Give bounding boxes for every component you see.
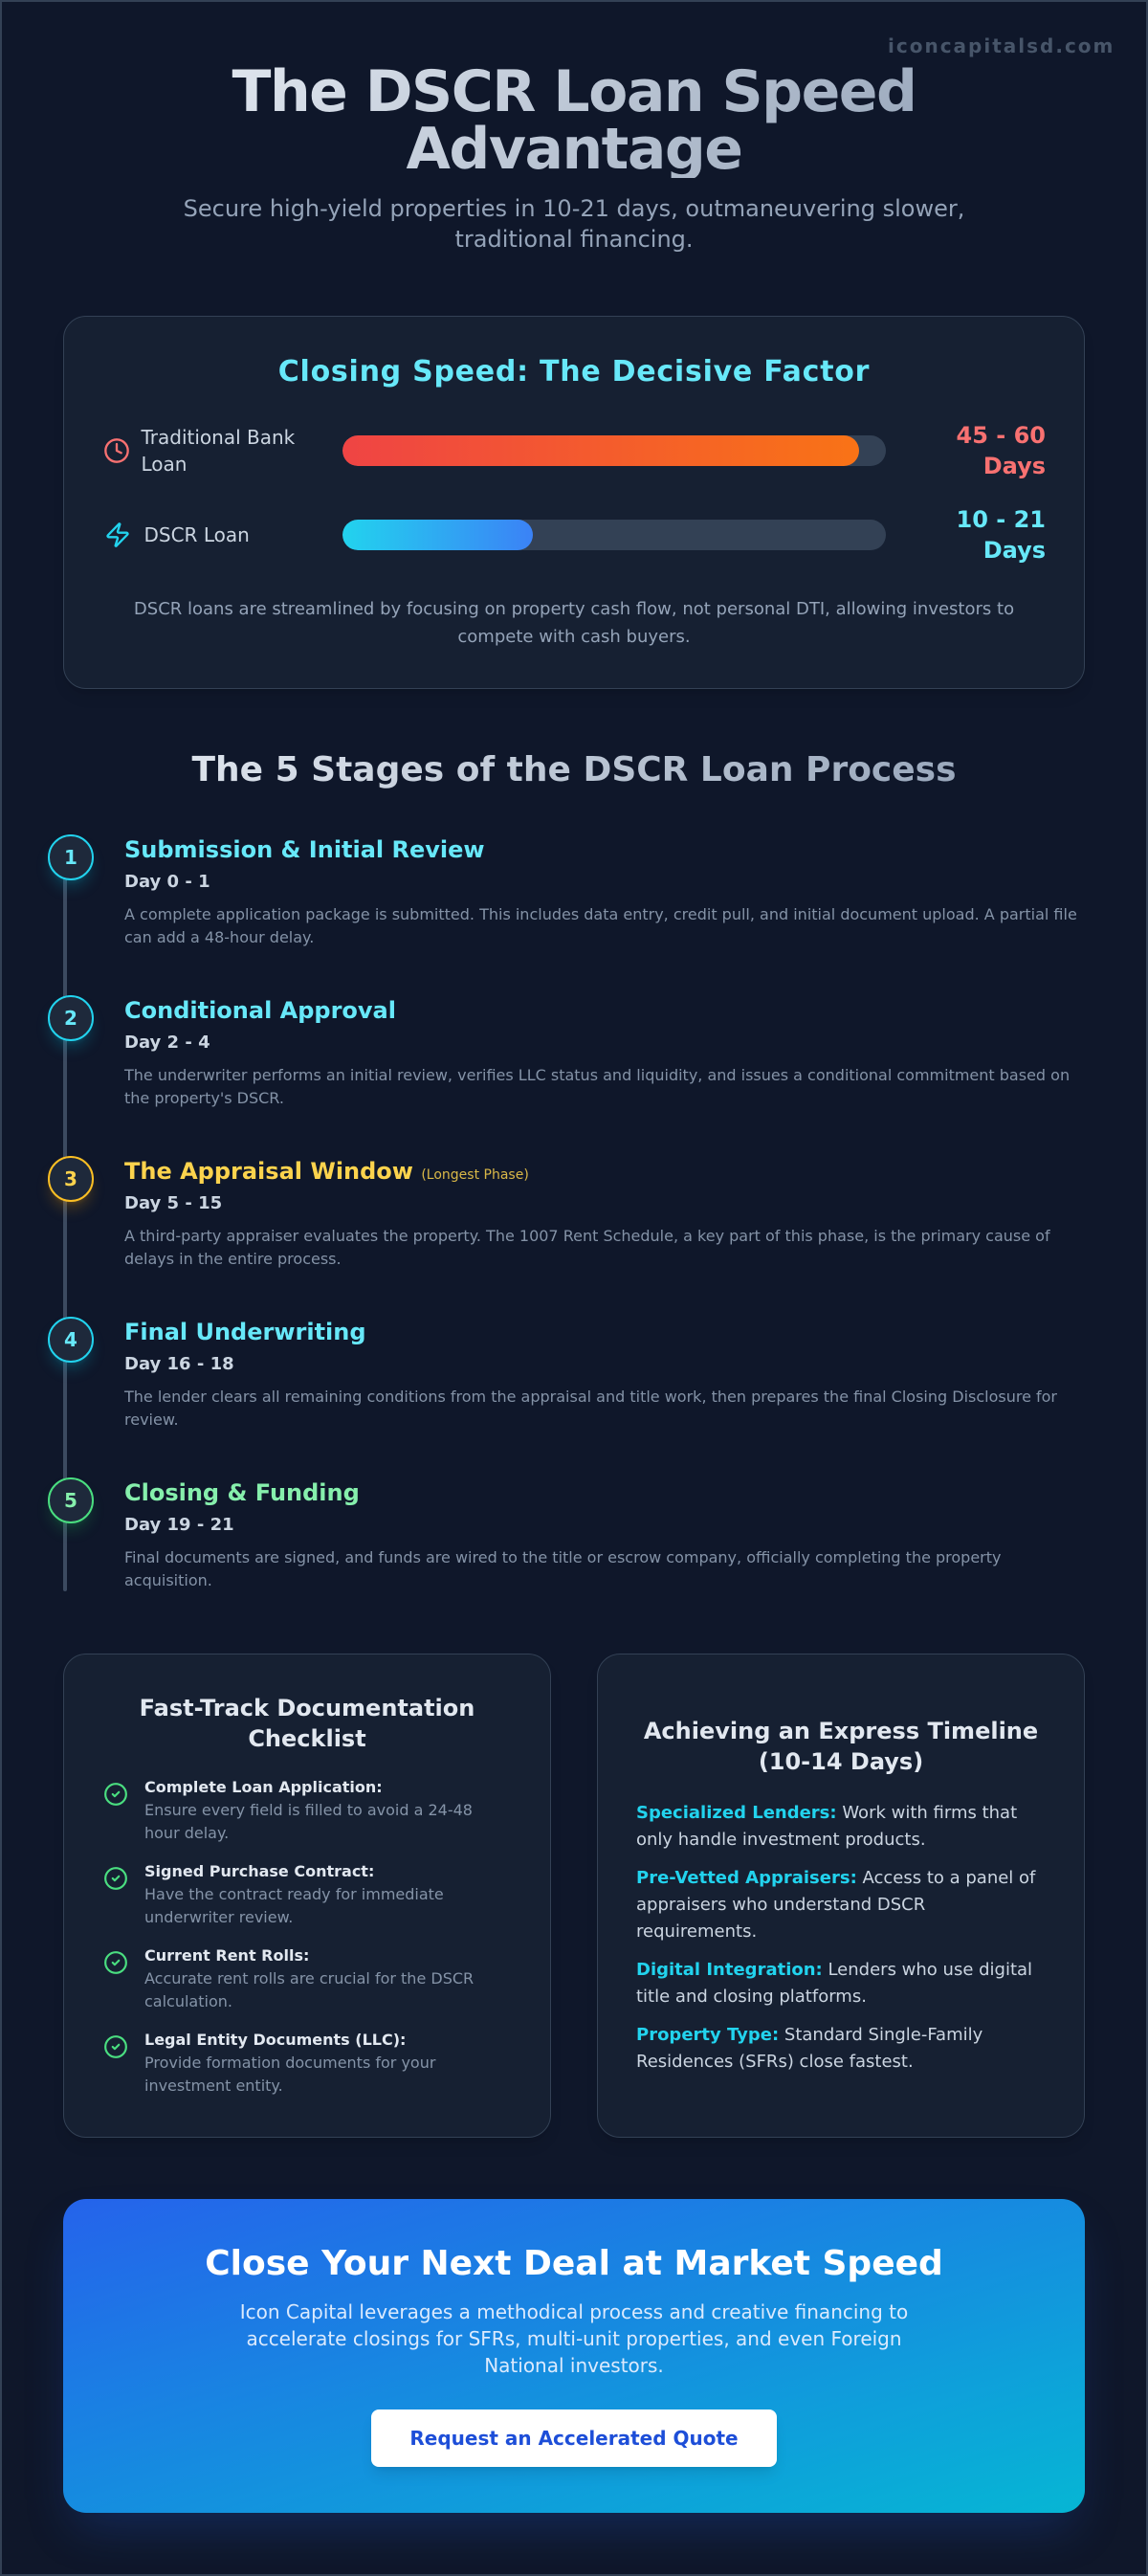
stage 5 marker (48, 1477, 94, 1523)
point: pre-vetted appraisers: appraisers who understand DSCR (636, 1895, 925, 1915)
CTA text: National investors. (484, 2354, 664, 2377)
checklist item 2: underwriter review. (144, 1908, 293, 1926)
point: digital integration: title and closing platforms. (636, 1987, 867, 2007)
label: traditional bank loan (141, 426, 295, 476)
panel heading: closing speed: Closing Speed: The Decisive Factor (278, 355, 870, 389)
closing speed note (134, 599, 1014, 647)
timeline line (63, 861, 67, 1591)
CTA button (371, 2409, 777, 2467)
checklist item 3: Current Rent Rolls: (144, 1946, 309, 1965)
express timeline heading: Achieving an Express Timeline (644, 1718, 1038, 1744)
stage 5: Final documents are signed, and funds are wired to the title or escrow company, officially completing the property (124, 1548, 1001, 1566)
value: DSCR days: Days (983, 537, 1046, 564)
stage 5: Closing & Funding (124, 1479, 360, 1506)
stage 3 marker: 3 (64, 1167, 77, 1190)
stage 2: The underwriter performs an initial review, verifies LLC status and liquidity, and issues a conditional commitment based on (124, 1066, 1070, 1084)
checklist item 4: Provide formation documents for your (144, 2054, 435, 2072)
point: pre-vetted appraisers (636, 1868, 1036, 1942)
label: traditional bank loan: Traditional Bank (142, 426, 295, 449)
checklist heading: Checklist (248, 1725, 366, 1752)
CTA heading: Close Your Next Deal at Market Speed (205, 2244, 943, 2283)
point: pre-vetted appraisers: requirements. (636, 1921, 757, 1942)
stage 4 (124, 1319, 1057, 1429)
stage 4: review. (124, 1410, 179, 1429)
point: digital integration: Digital Integration: Lenders who use digital (636, 1960, 1032, 1980)
express timeline heading (644, 1718, 1038, 1775)
panel: closing speed (63, 316, 1085, 689)
stage 3 (124, 1158, 1050, 1268)
stage 1: A complete application package is submitted. This includes data entry, credit pull, and initial document upload. A partial file (124, 905, 1077, 923)
checklist item 4: Legal Entity Documents (LLC): (144, 2031, 406, 2049)
CTA text: accelerate closings for SFRs, multi-unit properties, and even Foreign (246, 2327, 902, 2350)
stage 1 (124, 836, 1077, 946)
stage 2 (124, 997, 1070, 1107)
stage 1 marker (48, 834, 94, 880)
stage 5: Day 19 - 21 (124, 1515, 234, 1535)
label: traditional bank loan: Loan (142, 453, 187, 476)
icon: check 1 (104, 1783, 127, 1806)
closing speed note: compete with cash buyers. (457, 627, 691, 647)
icon: check 4 (104, 2035, 127, 2058)
stage 5 marker: 5 (64, 1489, 77, 1512)
bar: DSCR (342, 520, 886, 550)
stage 2 marker: 2 (64, 1007, 77, 1030)
checklist item 3: Accurate rent rolls are crucial for the DSCR (144, 1969, 474, 1988)
stage 3: delays in the entire process. (124, 1250, 342, 1268)
stage 1: can add a 48-hour delay. (124, 928, 314, 946)
icon: check 3 (104, 1951, 127, 1974)
subtitle: traditional financing. (454, 226, 694, 253)
icon: clock (104, 438, 129, 463)
checklist item 1: hour delay. (144, 1824, 229, 1842)
point: pre-vetted appraisers: Pre-Vetted Appraisers: Access to a panel of (636, 1868, 1035, 1888)
point: property type: Property Type: Standard Single-Family (636, 2025, 982, 2045)
value: traditional days (957, 422, 1046, 479)
stage 2: Day 2 - 4 (124, 1033, 210, 1053)
point: specialized lenders: only handle investment products. (636, 1830, 926, 1850)
point: specialized lenders (636, 1803, 1017, 1850)
panel: checklist (63, 1654, 551, 2138)
stage 5: acquisition. (124, 1571, 212, 1589)
value: DSCR days: 10 - 21 (957, 506, 1046, 533)
point: property type: Residences (SFRs) close fastest. (636, 2052, 914, 2072)
icon: lightning bolt (106, 522, 129, 547)
stage 5 (124, 1479, 1001, 1589)
checklist item 4: investment entity. (144, 2076, 283, 2095)
icon: check 2 (104, 1867, 127, 1890)
stage 1 marker: 1 (64, 846, 77, 869)
value: traditional days: 45 - 60 (957, 422, 1046, 449)
checklist item 2: Signed Purchase Contract: (144, 1862, 374, 1880)
closing speed note: DSCR loans are streamlined by focusing on property cash flow, not personal DTI, allowing investors to (134, 599, 1014, 619)
value: traditional days: Days (983, 453, 1046, 479)
stage 4 marker (48, 1317, 94, 1363)
heading: five stages: The 5 Stages of the DSCR Loan Process (191, 750, 957, 789)
watermark: iconcapitalsd.com (888, 34, 1115, 57)
stage 2: Conditional Approval (124, 997, 396, 1024)
point: specialized lenders: Specialized Lenders: Work with firms that (636, 1803, 1017, 1823)
checklist item 1: Ensure every field is filled to avoid a 24-48 (144, 1801, 473, 1819)
checklist item 1 (144, 1778, 473, 1842)
checklist item 2 (144, 1862, 444, 1926)
panel: call to action (63, 2199, 1085, 2513)
checklist item 4 (144, 2031, 436, 2095)
CTA text: Icon Capital leverages a methodical process and creative financing to (240, 2300, 908, 2323)
checklist heading: Fast-Track Documentation (140, 1695, 475, 1721)
stage 4: Day 16 - 18 (124, 1354, 234, 1374)
checklist item 2: Have the contract ready for immediate (144, 1885, 444, 1903)
stage 4: Final Underwriting (124, 1319, 366, 1345)
stage 2 marker (48, 995, 94, 1041)
point: digital integration (636, 1960, 1032, 2007)
stage 3: A third-party appraiser evaluates the property. The 1007 Rent Schedule, a key part of this phase, is the primary cause of (124, 1227, 1050, 1245)
value: DSCR days (957, 506, 1046, 564)
stage 3: Day 5 - 15 (124, 1193, 222, 1213)
stage 3: The Appraisal Window (Longest Phase) (124, 1158, 529, 1185)
stage 4: The lender clears all remaining conditions from the appraisal and title work, then prepares the final Closing Disclosure for (124, 1388, 1057, 1406)
bar: traditional (342, 435, 886, 466)
express timeline heading: (10-14 Days) (759, 1748, 923, 1775)
label: DSCR loan: DSCR Loan (144, 523, 250, 546)
checklist item 1: Complete Loan Application: (144, 1778, 383, 1796)
checklist heading (140, 1695, 475, 1752)
stage 3 marker (48, 1156, 94, 1202)
point: property type (636, 2025, 982, 2072)
stage 4 marker: 4 (64, 1328, 77, 1351)
CTA text (240, 2300, 908, 2377)
subtitle (184, 195, 964, 253)
title: The DSCR Loan Speed (232, 58, 916, 125)
stage 1: Day 0 - 1 (124, 872, 210, 892)
stage 2: the property's DSCR. (124, 1089, 284, 1107)
title (191, 63, 957, 178)
checklist item 3 (144, 1946, 474, 2010)
panel: express timeline (597, 1654, 1085, 2138)
checklist item 3: calculation. (144, 1992, 232, 2010)
title: Advantage (406, 116, 742, 183)
CTA button: Request an Accelerated Quote (409, 2427, 739, 2450)
stage 1: Submission & Initial Review (124, 836, 485, 863)
subtitle: Secure high-yield properties in 10-21 days, outmaneuvering slower, (184, 195, 964, 222)
